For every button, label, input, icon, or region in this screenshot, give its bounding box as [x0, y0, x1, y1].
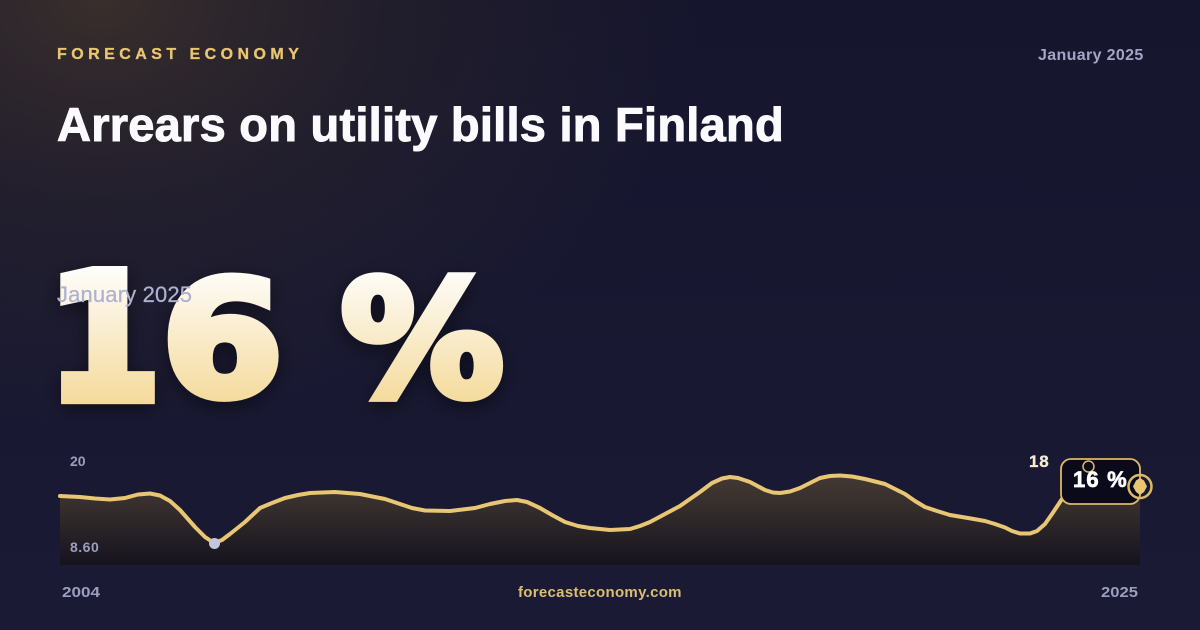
- current value callout: [1061, 459, 1140, 504]
- big value: 6: [162, 248, 283, 433]
- big value: %: [341, 247, 504, 433]
- big value: 1: [46, 237, 161, 441]
- callout value: 16 %: [1073, 467, 1128, 492]
- current point marker: [1128, 475, 1152, 498]
- peak marker: [1083, 461, 1094, 472]
- axis min label: 8.60: [70, 539, 99, 555]
- overlapping date label: January 2025: [57, 282, 192, 307]
- minimum marker: [209, 538, 220, 549]
- title: Arrears on utility bills in Finland: [57, 98, 784, 151]
- chart area fill: [60, 476, 1140, 565]
- big value: [46, 237, 504, 441]
- chart line: [60, 476, 1064, 543]
- brand label: FORECAST ECONOMY: [57, 46, 303, 63]
- end year: 2025: [1101, 585, 1138, 601]
- start year: 2004: [62, 584, 100, 601]
- previous peak label: 18: [1029, 452, 1050, 471]
- line chart: [60, 452, 1152, 565]
- website: forecasteconomy.com: [518, 584, 682, 601]
- header date: January 2025: [1038, 47, 1144, 64]
- axis max label: 20: [70, 453, 86, 469]
